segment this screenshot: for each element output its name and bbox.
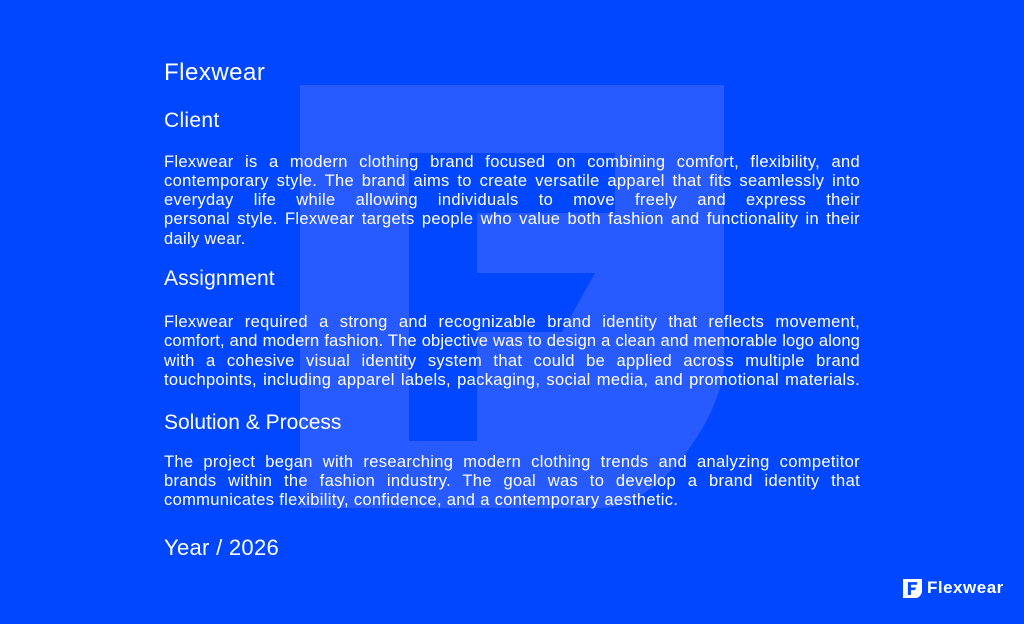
text block: assignment description: Flexwear required a strong and recognizable brand identity that reflects movement, bbox=[164, 313, 860, 331]
text block: client description: contemporary style. The brand aims to create versatile apparel that fits seamlessly into bbox=[164, 172, 860, 190]
text block: client description: daily wear. bbox=[164, 230, 246, 248]
text block: client description: everyday life while allowing individuals to move freely and express their bbox=[164, 191, 860, 209]
text block: client description: Flexwear is a modern clothing brand focused on combining comfort, flexibility, and bbox=[164, 152, 860, 170]
text block: solution description: communicates flexibility, confidence, and a contemporary aesthetic. bbox=[164, 491, 678, 509]
year label: Year / 2026 bbox=[164, 535, 279, 560]
title: Flexwear bbox=[164, 59, 265, 86]
text block: assignment description: touchpoints, including apparel labels, packaging, social media, and promotional materials. bbox=[164, 371, 860, 389]
heading: assignment: Assignment bbox=[164, 267, 275, 290]
heading: solution and process: Solution & Process bbox=[164, 411, 341, 434]
text block: solution description: The project began with researching modern clothing trends and analyzing competitor bbox=[164, 452, 860, 470]
text block: solution description bbox=[164, 452, 860, 509]
text block: client description: personal style. Flexwear targets people who value both fashion and functionality in their bbox=[164, 210, 860, 228]
text block: solution description: brands within the fashion industry. The goal was to develop a brand identity that bbox=[164, 472, 860, 490]
icon: Flexwear F mark bbox=[903, 579, 922, 598]
text block: assignment description bbox=[164, 313, 860, 389]
text block: client description bbox=[164, 152, 860, 248]
logo wordmark: Flexwear bbox=[927, 578, 1004, 597]
brand logo bbox=[903, 578, 1004, 598]
text block: assignment description: with a cohesive visual identity system that could be applied across multiple brand bbox=[164, 352, 860, 370]
heading: client: Client bbox=[164, 109, 220, 132]
text block: assignment description: comfort, and modern fashion. The objective was to design a clean and memorable logo along bbox=[164, 332, 860, 350]
